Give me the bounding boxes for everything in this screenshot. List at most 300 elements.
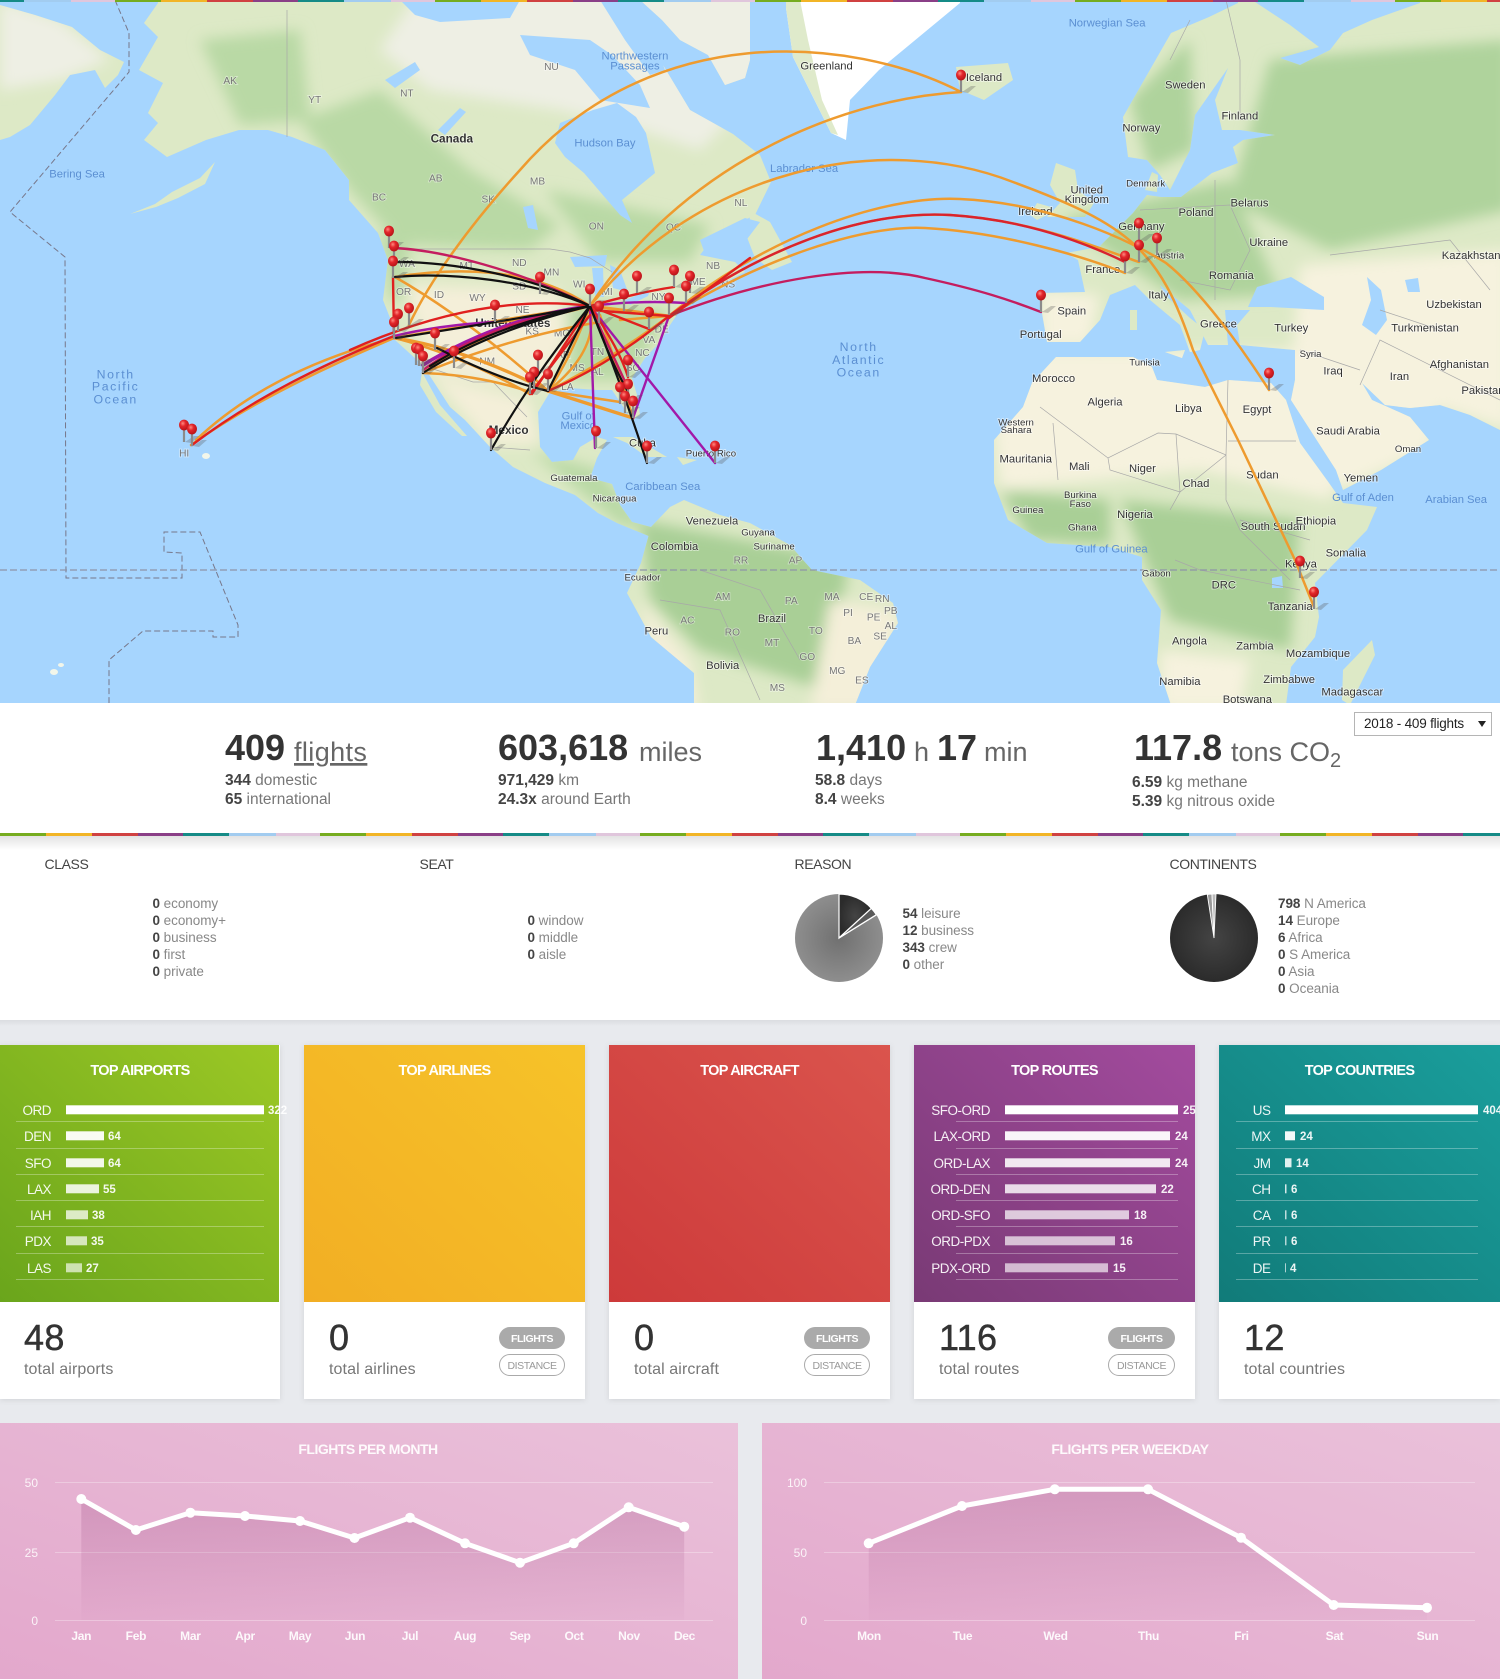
map labels: Romania <box>1209 270 1255 282</box>
stat: distance: miles <box>639 737 702 767</box>
card: top routes: TOP ROUTES <box>1011 1063 1099 1079</box>
map labels: Kingdom <box>1065 194 1109 206</box>
map labels: WA <box>399 259 415 270</box>
map labels: North <box>840 340 878 354</box>
country bars: US <box>1253 1103 1271 1118</box>
map labels: Turkey <box>1274 323 1309 335</box>
stat: flights: 409 <box>225 727 285 768</box>
map labels: TO <box>809 626 823 637</box>
card: top countries: total countries <box>1244 1361 1345 1378</box>
map labels: GO <box>799 652 815 663</box>
chart panel: flights per weekday <box>762 1423 1500 1679</box>
map labels: TN <box>591 347 604 358</box>
map labels: Faso <box>1070 499 1091 510</box>
map labels: MT <box>459 261 474 272</box>
map labels: SE <box>873 632 887 643</box>
map labels: Nicaragua <box>593 493 637 504</box>
chart panel: flights per weekday: Tue <box>953 1629 973 1643</box>
map labels: AL <box>591 367 604 378</box>
route bars: 16 <box>1120 1236 1133 1248</box>
card: top countries: 12 <box>1244 1317 1285 1358</box>
map labels: Arabian Sea <box>1425 494 1488 506</box>
map labels: Madagascar <box>1321 687 1383 699</box>
card: top routes <box>914 1045 1196 1399</box>
map land masses <box>0 0 1500 705</box>
map labels: ID <box>434 290 444 301</box>
chart panel: flights per weekday: Fri <box>1234 1629 1249 1643</box>
airport bars: ORD <box>22 1103 52 1118</box>
map labels: NY <box>651 292 666 303</box>
map labels: Hudson Bay <box>574 137 636 149</box>
route bars: ORD-LAX <box>933 1156 990 1171</box>
chart panel: flights per month: Nov <box>618 1629 641 1643</box>
map labels: MN <box>544 268 559 279</box>
stat: distance <box>498 727 702 808</box>
map labels: Suriname <box>754 542 795 553</box>
route bars: PDX-ORD <box>931 1261 991 1276</box>
reason pie chart <box>795 894 883 982</box>
chart panel: flights per month: Apr <box>235 1629 256 1643</box>
card: top routes: total routes <box>939 1361 1019 1378</box>
chart panel: flights per month: Jul <box>402 1629 418 1643</box>
islands <box>50 453 210 675</box>
map labels: WY <box>469 293 486 304</box>
map labels: Guatemala <box>550 473 598 484</box>
country bars: MX <box>1251 1129 1271 1144</box>
stat: duration: h <box>914 737 929 767</box>
chart panel: flights per weekday: Sat <box>1326 1629 1344 1643</box>
map labels: ON <box>589 221 604 232</box>
stat: duration: 17 <box>937 727 977 768</box>
map labels: Afghanistan <box>1430 359 1489 371</box>
airport bars: 64 <box>108 1158 121 1170</box>
toggle pills: FLIGHTS <box>816 1333 858 1345</box>
seat breakdown: 0 aisle <box>528 947 566 962</box>
map labels: Gabon <box>1142 568 1171 579</box>
seat breakdown: SEAT <box>420 856 454 872</box>
route bars: 18 <box>1134 1210 1147 1222</box>
chart panel: flights per month: Jun <box>345 1629 365 1643</box>
map labels: Morocco <box>1032 373 1075 385</box>
map labels: Yemen <box>1344 473 1378 485</box>
map labels: Cuba <box>629 437 657 449</box>
map labels: Bering Sea <box>49 169 106 181</box>
reason breakdown <box>794 856 974 982</box>
chart panel: flights per weekday: Wed <box>1043 1629 1068 1643</box>
class breakdown <box>44 856 226 979</box>
stat: emissions <box>1132 727 1341 810</box>
chart panel: flights per month: Mar <box>180 1629 201 1643</box>
map labels: AR <box>556 350 570 361</box>
map labels: AP <box>789 556 803 567</box>
map labels: Belarus <box>1230 197 1269 209</box>
map labels: NT <box>400 89 414 100</box>
chart panel: flights per weekday: FLIGHTS PER WEEKDAY <box>1051 1441 1210 1457</box>
map labels: Poland <box>1178 207 1213 219</box>
card: top airlines: total airlines <box>329 1361 416 1378</box>
crimson routes <box>394 248 1041 388</box>
map labels: Ethiopia <box>1296 515 1337 527</box>
card: top airports: 48 <box>24 1317 65 1358</box>
airport bars: 27 <box>86 1263 99 1275</box>
route bars: LAX-ORD <box>933 1129 991 1144</box>
airport bars: 322 <box>268 1105 287 1117</box>
class breakdown: 0 business <box>152 930 217 945</box>
map terrain shading <box>0 0 1500 710</box>
map labels: MO <box>554 329 570 340</box>
chart panel: flights per month: 25 <box>25 1546 38 1560</box>
map labels: South Sudan <box>1241 521 1306 533</box>
map labels: Sweden <box>1165 80 1206 92</box>
map labels: Guinea <box>1012 505 1044 516</box>
airport bars: 64 <box>108 1131 121 1143</box>
orange routes <box>191 52 1314 607</box>
map labels: NS <box>721 279 735 290</box>
map labels: CE <box>859 592 873 603</box>
map labels: MS <box>569 363 585 374</box>
map labels: Italy <box>1148 290 1169 302</box>
red routes <box>192 215 1125 445</box>
airport bars: LAS <box>27 1261 51 1276</box>
map labels: Oman <box>1395 444 1421 455</box>
continents breakdown: 14 Europe <box>1278 913 1340 928</box>
stat: flights: 344 domestic <box>225 772 317 789</box>
map labels: Iceland <box>966 72 1002 84</box>
map labels: BC <box>372 193 386 204</box>
card: top airports: TOP AIRPORTS <box>90 1063 191 1079</box>
map labels: Labrador Sea <box>770 163 839 175</box>
stat: flights <box>225 727 367 808</box>
map labels: QC <box>666 223 681 234</box>
map labels: United <box>1071 185 1103 197</box>
map labels: SC <box>626 363 640 374</box>
stat: duration: 1,410 <box>816 727 906 768</box>
toggle pills: DISTANCE <box>507 1360 557 1372</box>
stat: duration: 8.4 weeks <box>815 791 885 808</box>
card: top airlines: 0 <box>329 1317 349 1358</box>
map labels: Western <box>998 417 1034 428</box>
continents breakdown <box>1170 856 1366 996</box>
map labels: KS <box>525 326 539 337</box>
map labels: RO <box>725 627 740 638</box>
chart panel: flights per month: FLIGHTS PER MONTH <box>298 1441 438 1457</box>
map labels: SD <box>512 281 526 292</box>
airport bars: DEN <box>24 1129 51 1144</box>
map labels: Bolivia <box>706 660 740 672</box>
purple routes <box>394 302 715 463</box>
country bars: DE <box>1253 1261 1271 1276</box>
airport bars: 55 <box>103 1184 116 1196</box>
card: top airlines <box>304 1045 585 1399</box>
map labels: Iran <box>1390 371 1409 383</box>
map labels: Angola <box>1172 635 1208 647</box>
card: top aircraft: total aircraft <box>634 1361 719 1378</box>
class breakdown: 0 first <box>152 947 185 962</box>
map labels: ME <box>690 277 706 288</box>
map labels: France <box>1085 264 1120 276</box>
stat: emissions: 6.59 kg methane <box>1132 774 1247 791</box>
country bars: PR <box>1253 1234 1271 1249</box>
continents breakdown: 0 Oceania <box>1278 981 1340 996</box>
map labels: Norwegian Sea <box>1069 18 1146 30</box>
stat: emissions: 117.8 <box>1134 727 1222 768</box>
toggle pills <box>1108 1327 1175 1376</box>
map labels: Uzbekistan <box>1426 299 1482 311</box>
reason breakdown: REASON <box>794 856 851 872</box>
card: top aircraft: 0 <box>634 1317 654 1358</box>
country bars: 6 <box>1291 1210 1297 1222</box>
map labels: AM <box>715 592 730 603</box>
route bars: SFO-ORD <box>931 1103 991 1118</box>
stat: distance: 603,618 <box>498 727 628 768</box>
map labels: Peru <box>644 626 668 638</box>
chart panel: flights per month: Oct <box>564 1629 584 1643</box>
month line chart <box>76 1494 689 1620</box>
map labels: Kazakhstan <box>1442 250 1500 262</box>
continents breakdown: 0 Asia <box>1278 964 1315 979</box>
map labels: Brazil <box>758 613 786 625</box>
toggle pills <box>499 1327 565 1376</box>
chart panel: flights per month: Sep <box>509 1629 531 1643</box>
stat: distance: 24.3x around Earth <box>498 791 631 808</box>
map labels: MG <box>829 666 846 677</box>
map background <box>0 0 1500 710</box>
chart panel: flights per month: 50 <box>25 1476 38 1490</box>
reason breakdown: 54 leisure <box>902 906 961 921</box>
map labels: Sahara <box>1001 425 1032 436</box>
map labels: Somalia <box>1326 548 1367 560</box>
map labels: Venezuela <box>686 515 739 527</box>
map labels: Germany <box>1118 221 1165 233</box>
route bars: ORD-PDX <box>931 1234 990 1249</box>
card: top aircraft <box>609 1045 890 1399</box>
seat breakdown <box>420 856 584 962</box>
map labels: SK <box>481 195 495 206</box>
map labels: Ukraine <box>1249 237 1288 249</box>
chart panel: flights per weekday: 50 <box>794 1546 807 1560</box>
map labels: Chad <box>1183 478 1209 490</box>
map labels: Ireland <box>1018 206 1053 218</box>
chart panel: flights per month: Dec <box>674 1629 696 1643</box>
map labels: NM <box>479 356 495 367</box>
airport bars: 35 <box>91 1236 104 1248</box>
map labels: Syria <box>1300 349 1322 360</box>
map labels: Zambia <box>1236 641 1274 653</box>
map labels: Ghana <box>1068 522 1098 533</box>
map labels: PA <box>785 596 798 607</box>
reason breakdown: 12 business <box>902 923 974 938</box>
country bars: 24 <box>1300 1131 1313 1143</box>
route bars: 24 <box>1175 1158 1188 1170</box>
route bars: 15 <box>1113 1263 1126 1275</box>
map labels: Ocean <box>837 366 881 380</box>
map labels: MS <box>770 683 785 694</box>
airport bars <box>16 1103 287 1280</box>
map labels: Nigeria <box>1117 509 1153 521</box>
map labels: Colombia <box>651 541 699 553</box>
map labels: DE <box>655 324 669 335</box>
map labels: MI <box>601 287 613 298</box>
map labels: Libya <box>1175 403 1203 415</box>
chart panel: flights per weekday: 100 <box>787 1476 807 1490</box>
continents breakdown: CONTINENTS <box>1170 856 1257 872</box>
map labels: Greece <box>1200 318 1237 330</box>
map labels: United States <box>475 317 551 330</box>
weekday line chart <box>864 1484 1432 1620</box>
card: top countries <box>1219 1045 1500 1399</box>
class breakdown: 0 economy <box>152 896 218 911</box>
class breakdown: 0 private <box>152 964 204 979</box>
map labels: MA <box>824 592 840 603</box>
map labels: Gulf of Aden <box>1332 492 1394 504</box>
country bars: CA <box>1253 1208 1271 1223</box>
continents pie chart <box>1170 894 1258 982</box>
map labels: Turkmenistan <box>1391 323 1459 335</box>
route bars: 22 <box>1161 1184 1174 1196</box>
chart panel: flights per month: Jan <box>71 1629 91 1643</box>
map labels: Mali <box>1069 461 1090 473</box>
map labels: LA <box>561 382 574 393</box>
year selector: 2018 - 409 flights <box>1364 716 1464 731</box>
map labels: ES <box>855 675 869 686</box>
map labels: Saudi Arabia <box>1316 425 1381 437</box>
stat: flights: flights <box>294 737 367 767</box>
map labels: NB <box>706 261 720 272</box>
country bars: 6 <box>1291 1236 1297 1248</box>
map labels: MB <box>530 177 545 188</box>
map labels: Portugal <box>1020 329 1062 341</box>
map labels: Puerto Rico <box>686 448 736 459</box>
map labels: Niger <box>1129 463 1156 475</box>
map labels: NL <box>734 198 748 209</box>
chart panel: flights per weekday: 0 <box>800 1614 807 1628</box>
map labels: Canada <box>431 133 474 146</box>
chart panel: flights per month <box>0 1423 738 1679</box>
map labels: AC <box>680 616 694 627</box>
map labels: Atlantic <box>832 353 885 367</box>
map labels: Tunisia <box>1129 357 1161 368</box>
stat: duration <box>815 727 1028 808</box>
map labels: HI <box>179 448 189 459</box>
breakdown panel <box>0 836 1500 1026</box>
map labels: Norway <box>1122 122 1161 134</box>
map labels: Mexico <box>489 424 529 437</box>
toggle pills: DISTANCE <box>1117 1360 1166 1372</box>
continents breakdown: 6 Africa <box>1278 930 1323 945</box>
map labels <box>49 18 1500 706</box>
map labels: YT <box>308 95 321 106</box>
map water bodies <box>385 0 1420 588</box>
card: top airports <box>0 1045 287 1399</box>
card: top airlines: TOP AIRLINES <box>398 1063 492 1079</box>
top rainbow strip <box>0 0 1500 2</box>
card: top countries: TOP COUNTRIES <box>1305 1063 1415 1079</box>
continents breakdown: 0 S America <box>1278 947 1351 962</box>
reason breakdown: 343 crew <box>902 940 957 955</box>
rainbow divider <box>0 833 1500 836</box>
airport bars: PDX <box>25 1234 51 1249</box>
map labels: Guyana <box>741 528 776 539</box>
card: top routes: 116 <box>939 1317 997 1358</box>
stats panel <box>0 703 1500 833</box>
map labels: Egypt <box>1243 404 1272 416</box>
airport bars: SFO <box>25 1156 51 1171</box>
map labels: PB <box>884 606 898 617</box>
map labels: Mexico <box>560 420 596 432</box>
map labels: Gulf of Guinea <box>1075 543 1148 555</box>
map labels: WI <box>573 279 585 290</box>
toggle pills: FLIGHTS <box>511 1333 553 1345</box>
map labels: Zimbabwe <box>1263 674 1315 686</box>
map labels: Ocean <box>94 392 138 406</box>
seat breakdown: 0 middle <box>528 930 578 945</box>
map labels: VA <box>642 335 655 346</box>
map labels: Kenya <box>1285 558 1318 570</box>
black routes <box>395 262 647 463</box>
country bars: 6 <box>1291 1184 1297 1196</box>
map labels: North <box>97 368 135 382</box>
map labels: Ecuador <box>624 573 661 584</box>
route bars <box>930 1103 1196 1280</box>
map labels: Finland <box>1221 111 1258 123</box>
stat: duration: min <box>984 737 1028 767</box>
map labels: Namibia <box>1159 676 1201 688</box>
card: top airports: total airports <box>24 1361 113 1378</box>
map labels: Sudan <box>1246 469 1279 481</box>
stat: distance: 971,429 km <box>498 772 579 789</box>
map labels: AK <box>223 76 237 87</box>
stat: flights: 65 international <box>225 791 331 808</box>
flight routes <box>191 52 1314 607</box>
map labels: PI <box>843 608 853 619</box>
chart panel: flights per weekday: Mon <box>857 1629 881 1643</box>
map labels: NC <box>635 348 650 359</box>
map labels: Iraq <box>1323 366 1343 378</box>
country bars: 14 <box>1296 1158 1309 1170</box>
route bars: ORD-DEN <box>930 1182 990 1197</box>
route bars: ORD-SFO <box>931 1208 990 1223</box>
map labels: Passages <box>610 60 660 72</box>
map labels: ND <box>512 258 527 269</box>
chart panel: flights per month: Feb <box>126 1629 146 1643</box>
reason breakdown: 0 other <box>902 957 945 972</box>
country bars: JM <box>1254 1156 1271 1171</box>
map labels: BA <box>848 636 861 647</box>
map labels: Mozambique <box>1286 648 1350 660</box>
route bars: 24 <box>1175 1131 1188 1143</box>
toggle pills <box>804 1327 870 1376</box>
route bars: 25 <box>1183 1105 1196 1117</box>
map labels: OR <box>396 287 411 298</box>
toggle pills: DISTANCE <box>812 1360 862 1372</box>
map labels: Gulf of <box>562 411 596 423</box>
map labels: Mauritania <box>1000 453 1053 465</box>
stat: emissions: 5.39 kg nitrous oxide <box>1132 793 1275 810</box>
map labels: Northwestern <box>602 51 668 63</box>
card: top aircraft: TOP AIRCRAFT <box>700 1063 800 1079</box>
map labels: RR <box>734 556 748 567</box>
map labels: Caribbean Sea <box>625 481 701 493</box>
map pins <box>179 70 1329 610</box>
map labels: Botswana <box>1223 694 1273 706</box>
stat: emissions: tons CO <box>1231 737 1330 767</box>
class breakdown: 0 economy+ <box>152 913 226 928</box>
year selector <box>1354 712 1492 736</box>
country bars: 4 <box>1290 1263 1297 1275</box>
map labels: Denmark <box>1126 179 1165 190</box>
chart panel: flights per weekday: Thu <box>1138 1629 1159 1643</box>
map labels: Tanzania <box>1268 601 1313 613</box>
